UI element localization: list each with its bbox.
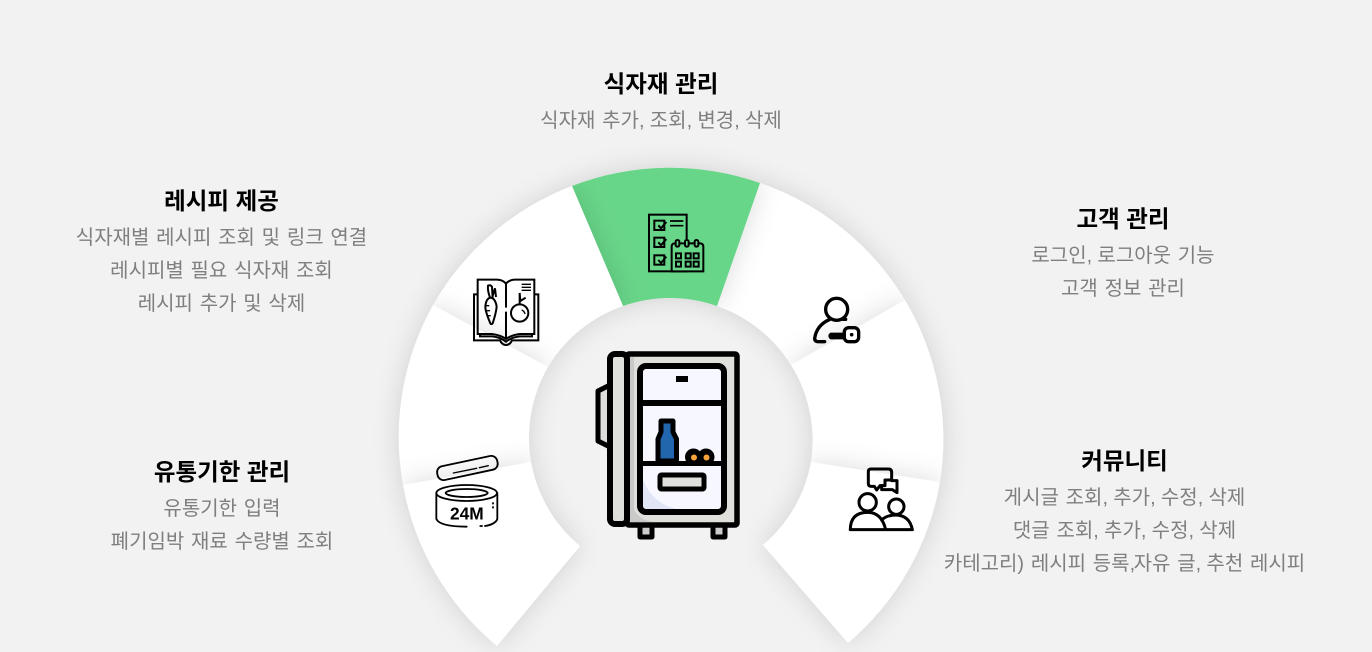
text block: expiry date: 폐기임박 재료 수량별 조회 <box>111 530 333 552</box>
segment: recipe <box>433 186 623 367</box>
segment: right middle <box>791 300 943 482</box>
text block: expiry date: 유통기한 관리 <box>154 459 290 485</box>
icon: 24M opened jar <box>436 455 499 527</box>
segment: ingredient management (highlighted) <box>572 168 760 306</box>
text block: ingredient management <box>540 71 782 132</box>
text block: customer management: 로그인, 로그아웃 기능 <box>1031 244 1215 266</box>
text block: recipe: 레시피 추가 및 삭제 <box>138 292 305 314</box>
segment: left middle <box>399 305 548 485</box>
segment: community <box>763 462 940 643</box>
icon: checklist and calendar <box>649 215 703 271</box>
text block: recipe: 식자재별 레시피 조회 및 링크 연결 <box>76 226 367 248</box>
text block: expiry date <box>111 459 333 552</box>
segment: customer management <box>717 183 905 365</box>
text block: ingredient management: 식자재 추가, 조회, 변경, 삭제 <box>540 110 782 132</box>
icon: refrigerator <box>598 354 737 537</box>
text block: customer management: 고객 정보 관리 <box>1061 278 1185 300</box>
text block: customer management: 고객 관리 <box>1076 206 1170 232</box>
text block: community: 게시글 조회, 추가, 수정, 삭제 <box>1004 486 1245 508</box>
icon: recipe book <box>474 280 538 345</box>
text block: community: 댓글 조회, 추가, 수정, 삭제 <box>1013 520 1236 542</box>
icon: community people <box>850 469 912 530</box>
text block: community: 커뮤니티 <box>1081 448 1168 474</box>
text block: ingredient management: 식자재 관리 <box>604 71 718 97</box>
text block: customer management <box>1031 206 1215 300</box>
text block: recipe <box>76 188 367 314</box>
icon: 24M opened jar: 24M <box>450 504 484 524</box>
icon: person with key <box>815 298 859 342</box>
text block: community <box>944 448 1305 574</box>
segment: expiry date <box>403 462 580 646</box>
text block: recipe: 레시피 제공 <box>164 188 279 214</box>
text block: community: 카테고리) 레시피 등록,자유 글, 추천 레시피 <box>944 552 1305 574</box>
text block: expiry date: 유통기한 입력 <box>163 498 281 520</box>
text block: recipe: 레시피별 필요 식자재 조회 <box>110 260 333 282</box>
